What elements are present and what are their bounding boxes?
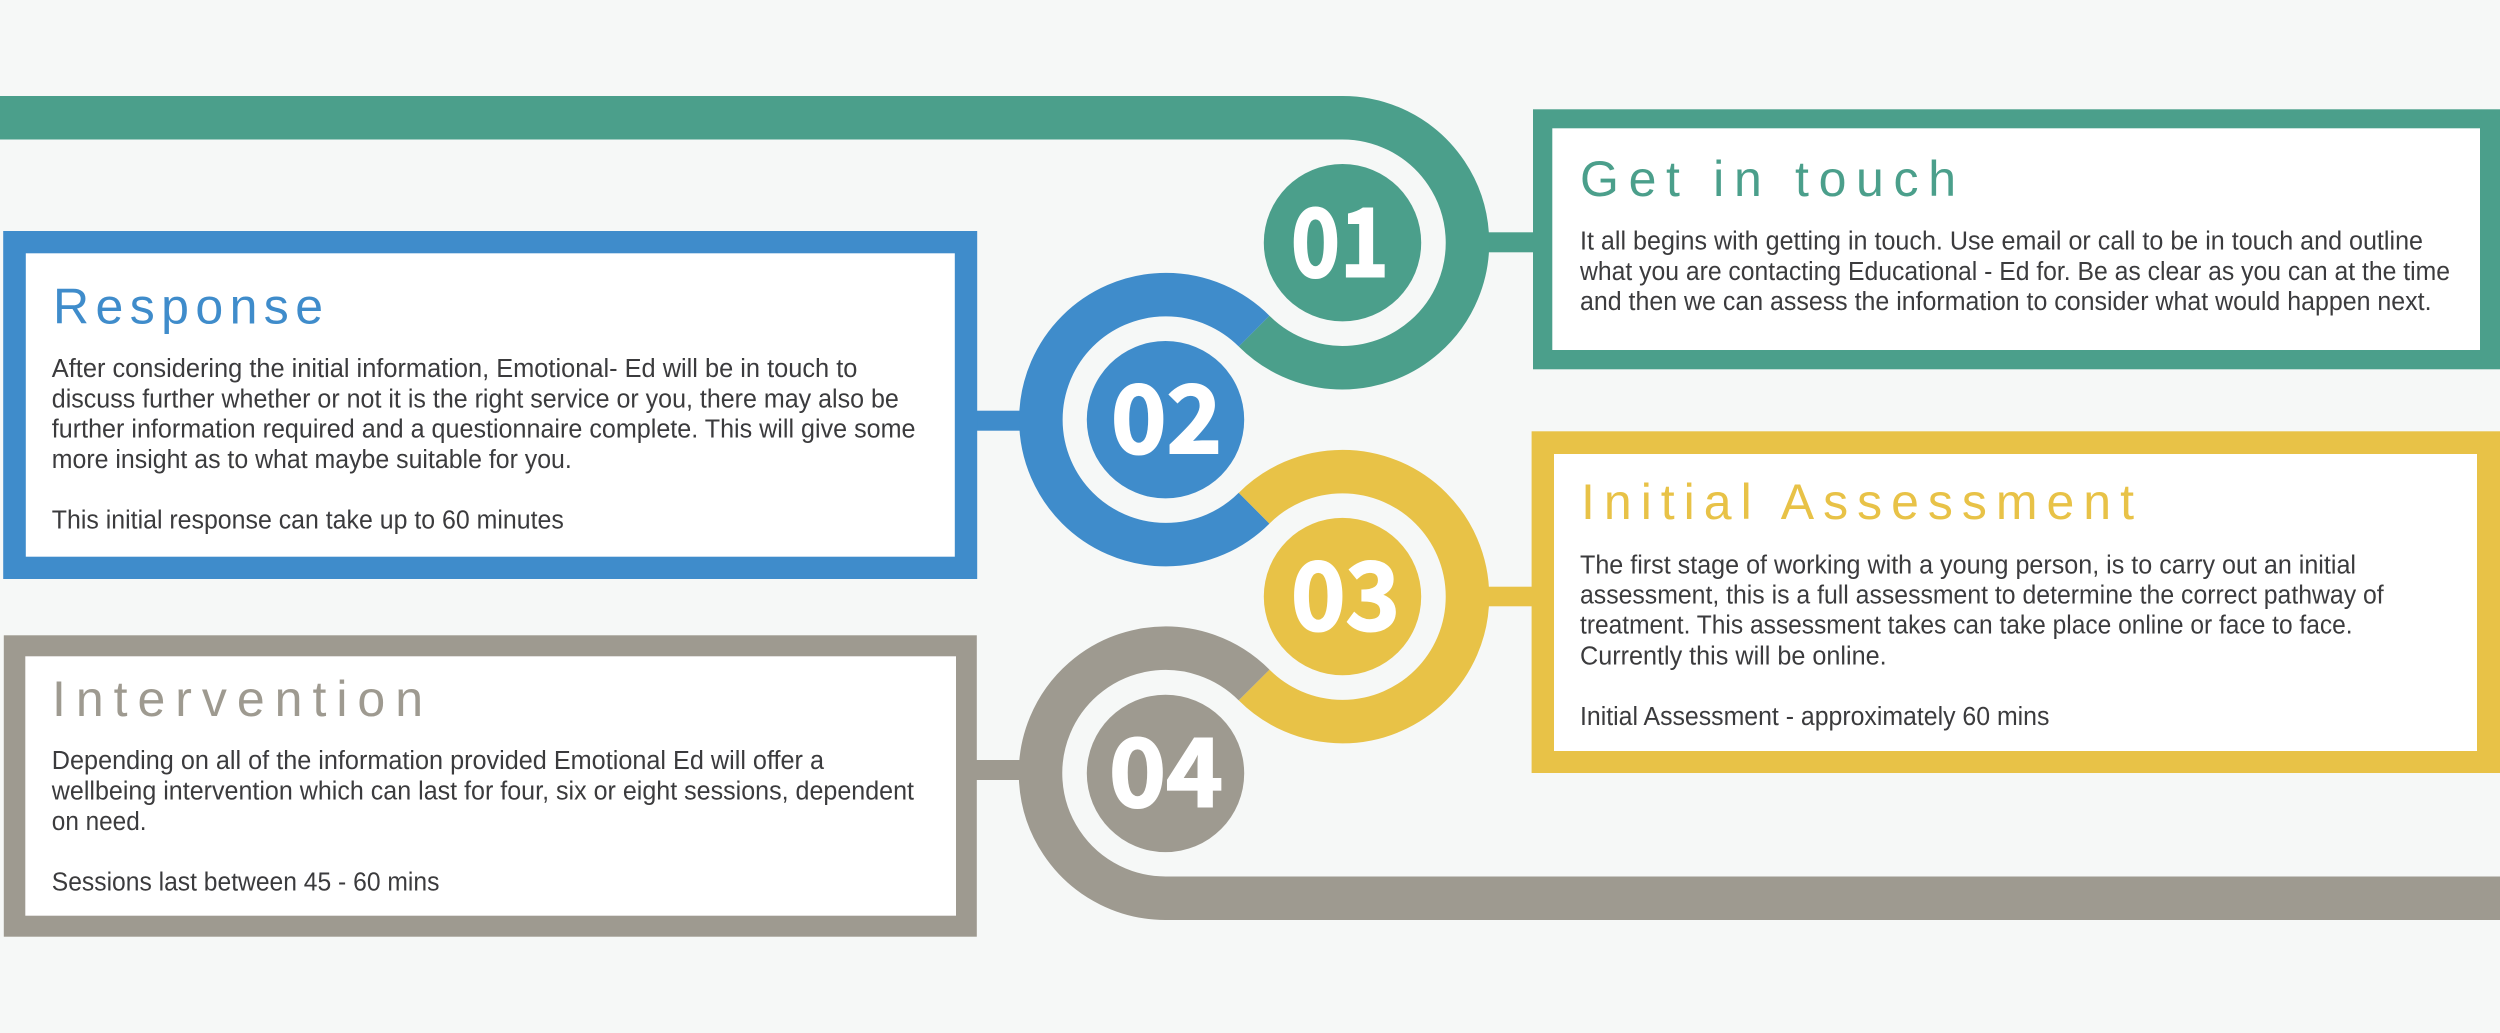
heading: Initial Assessment: Initial Assessment <box>1581 474 2134 530</box>
heading: Get in touch: Get in touch <box>1580 151 1956 207</box>
winding path: green segment <box>0 118 1467 368</box>
step 02 connector line <box>975 411 1023 431</box>
text block: Response description: more insight as to what maybe suitable for you. <box>52 446 572 474</box>
winding path: blue segment <box>1041 295 1254 545</box>
text block: Response description: further information required and a questionnaire complete. This will give some <box>52 416 916 444</box>
text block: Get in touch description: It all begins with getting in touch. Use email or call to be in touch and outline <box>1580 227 2423 255</box>
text block: Response description <box>52 355 916 534</box>
number badge 01: 01 <box>1291 169 1389 305</box>
number badge 02: 02 <box>1111 345 1222 481</box>
text block: Response description: After considering the initial information, Emotional- Ed will be in touch to <box>52 355 857 383</box>
heading: Intervention: Intervention <box>52 671 423 727</box>
step 03 connector line <box>1485 587 1535 606</box>
text block: Initial Assessment description: The first stage of working with a young person, is to carry out an initial <box>1580 551 2356 579</box>
text block: Intervention description: Depending on all of the information provided Emotional Ed will offer a <box>52 747 825 775</box>
step 04 connector line <box>975 760 1023 780</box>
panel: Get in touch <box>1533 109 2500 369</box>
winding path: yellow segment <box>1254 472 1467 722</box>
number badge 03: 03 <box>1291 522 1400 658</box>
text block: Intervention description <box>51 747 914 896</box>
text block: Intervention description: on need. <box>52 808 146 836</box>
heading: Response: Response <box>53 278 323 334</box>
text block: Initial Assessment description: assessment, this is a full assessment to determine the correct pathway of <box>1580 581 2385 609</box>
number badge 04: 04 <box>1109 699 1223 835</box>
text block: Response description: This initial response can take up to 60 minutes <box>52 506 564 534</box>
step 01 connector line <box>1485 232 1535 252</box>
number badge 01 <box>1264 164 1421 321</box>
text block: Initial Assessment description <box>1580 551 2385 731</box>
text block: Intervention description: Sessions last between 45 - 60 mins <box>52 868 439 896</box>
text block: Intervention description: wellbeing intervention which can last for four, six or eight sessions, dependent <box>51 778 914 806</box>
text block: Get in touch description <box>1579 227 2450 316</box>
number badge 03 <box>1264 518 1421 675</box>
text block: Initial Assessment description: treatment. This assessment takes can take place online or face to face. <box>1580 612 2353 640</box>
text block: Initial Assessment description: Initial Assessment - approximately 60 mins <box>1580 703 2049 731</box>
panel: Intervention <box>4 635 977 937</box>
number badge 04 <box>1087 695 1244 852</box>
text block: Initial Assessment description: Currently this will be online. <box>1580 642 1887 670</box>
panel: Response <box>3 231 977 579</box>
number badge 02 <box>1087 341 1244 498</box>
winding path: grey segment <box>1041 648 2500 898</box>
panel: Initial Assessment <box>1532 431 2500 773</box>
text block: Get in touch description: and then we can assess the information to consider what would happen next. <box>1580 288 2432 316</box>
text block: Response description: discuss further whether or not it is the right service or you, there may also be <box>52 385 899 413</box>
text block: Get in touch description: what you are contacting Educational - Ed for. Be as clear as you can at the time <box>1579 258 2450 286</box>
